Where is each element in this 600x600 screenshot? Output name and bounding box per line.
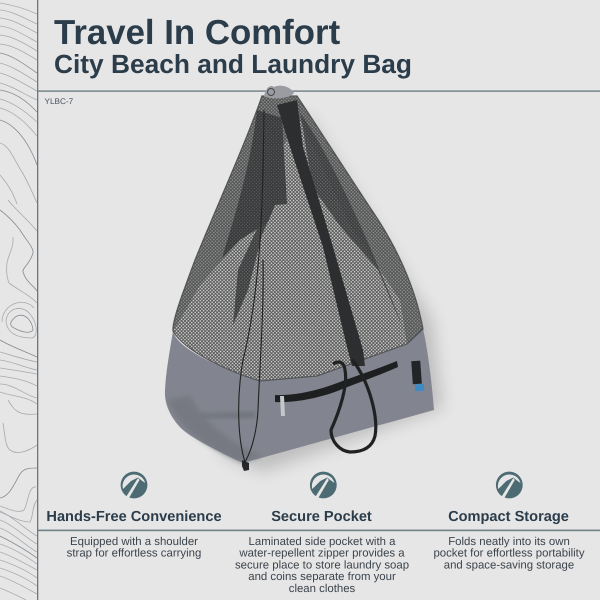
mesh body: [173, 96, 423, 381]
heading: Hands-Free Convenience: [46, 509, 222, 525]
bag shadow: [215, 110, 442, 472]
zipper pull: [280, 396, 285, 416]
inner fold left: [222, 110, 287, 258]
feature 2: [235, 472, 409, 595]
heading: Compact Storage: [448, 509, 569, 525]
top gathered knot: [264, 86, 294, 98]
cord toggle: [242, 460, 249, 471]
panel: topographic sidebar: [0, 3, 37, 600]
title: Travel In Comfort: [54, 13, 341, 52]
base shading: [168, 395, 262, 463]
brand label: [411, 361, 422, 384]
zipper pocket: [275, 361, 398, 402]
model number: YLBC-7: [44, 97, 74, 106]
product image: mesh laundry bag: [165, 86, 434, 471]
subtitle: City Beach and Laundry Bag: [54, 49, 412, 79]
description: clean clothes: [289, 583, 356, 595]
shoulder strap: [277, 100, 365, 366]
description: and space-saving storage: [444, 559, 574, 571]
bag gray base: [165, 329, 434, 463]
drawcord: [239, 110, 264, 462]
icon: mountain badge: [310, 472, 337, 498]
feature 1: [46, 472, 222, 560]
description: Laminated side pocket with a: [249, 536, 396, 548]
heading: Secure Pocket: [271, 509, 372, 525]
inner fold right: [300, 113, 405, 333]
description: Folds neatly into its own: [448, 536, 570, 548]
feature 3: [433, 472, 585, 571]
handle loop: [331, 360, 376, 452]
description: strap for effortless carrying: [67, 548, 201, 560]
description: Equipped with a shoulder: [70, 536, 198, 548]
description: secure place to store laundry soap: [235, 559, 409, 571]
darker upper mesh over background: [173, 96, 423, 344]
description: water-repellent zipper provides a: [238, 548, 405, 560]
description: and coins separate from your: [248, 571, 396, 583]
icon: mountain badge: [496, 472, 523, 498]
icon: mountain badge: [121, 472, 147, 498]
description: pocket for effortless portability: [433, 548, 585, 560]
